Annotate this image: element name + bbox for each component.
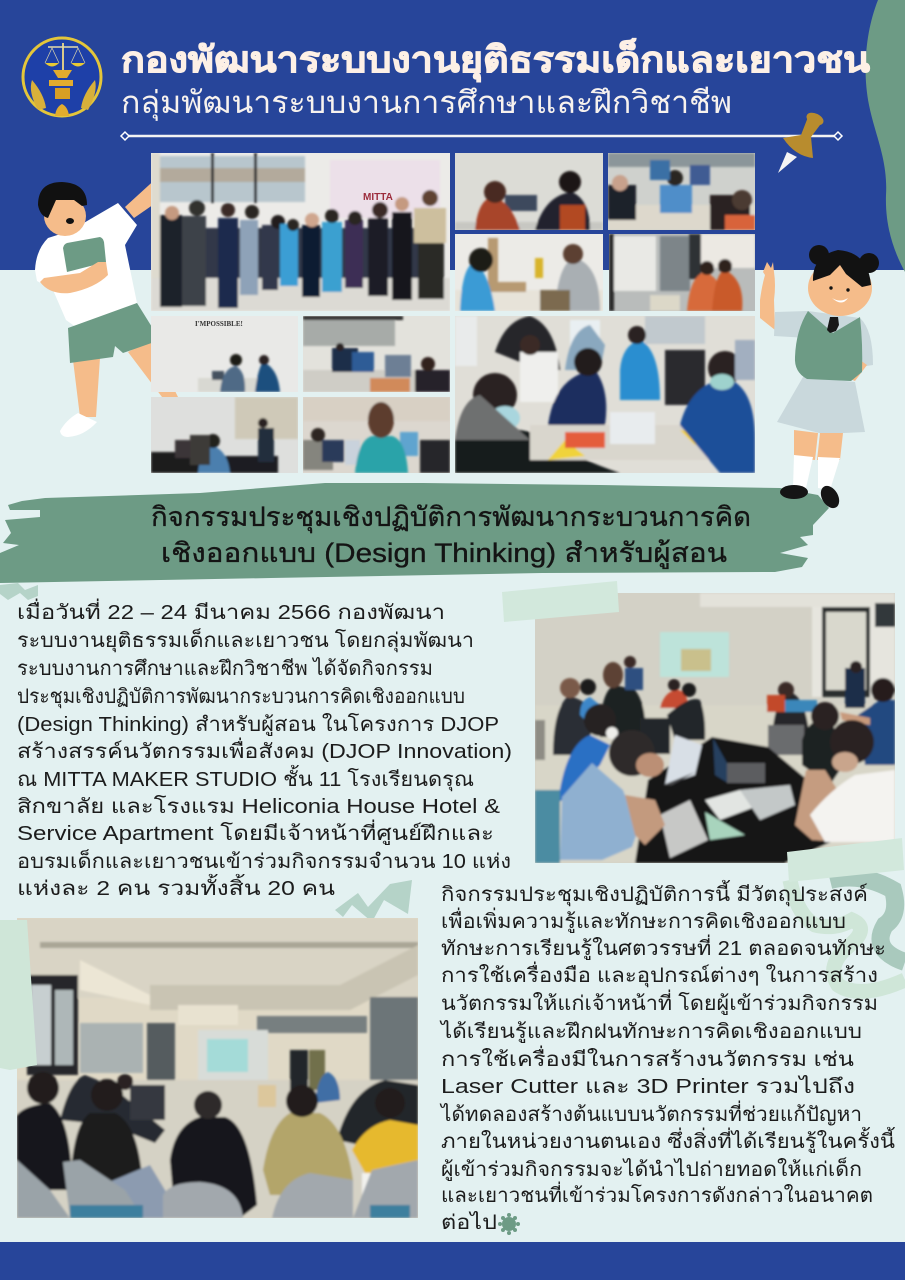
shoe bbox=[60, 413, 97, 437]
tie bbox=[827, 317, 839, 333]
photo: flipchart and two participants bbox=[609, 234, 755, 311]
body text: left column: สิกขาลัย และโรงแรม Heliconia House Hotel & bbox=[17, 795, 501, 818]
shoes bbox=[780, 483, 843, 511]
shorts bbox=[68, 303, 160, 363]
face bbox=[44, 196, 86, 236]
logo: department seal bbox=[23, 38, 101, 116]
text: wall slogan: I'MPOSSIBLE! bbox=[195, 320, 243, 328]
photo: workshop tables bbox=[608, 153, 755, 230]
skirt bbox=[777, 377, 865, 434]
mouth bbox=[66, 218, 74, 224]
heading text: กิจกรรมประชุมเชิงปฏิบัติการพัฒนากระบวนการคิด bbox=[151, 502, 751, 534]
socks bbox=[793, 455, 840, 490]
header blue band bbox=[0, 0, 905, 270]
character: girl in uniform bbox=[760, 245, 879, 511]
body text: left column: สร้างสรรค์นวัตกรรมเพื่อสังคม (DJOP Innovation) bbox=[17, 737, 512, 763]
shirt bbox=[35, 203, 137, 330]
photo: room seen from afar bbox=[151, 397, 298, 473]
body text: right column: ทักษะการเรียนรู้ในศตวรรษที่ 21 ตลอดจนทักษะ bbox=[441, 934, 886, 961]
bottom blue bar bbox=[0, 1242, 905, 1280]
photo: participant assembling model bbox=[455, 234, 603, 311]
body text: left column: เมื่อวันที่ 22 – 24 มีนาคม 2566 กองพัฒนา bbox=[17, 598, 445, 624]
vest bbox=[795, 311, 862, 381]
character: boy holding book bbox=[35, 175, 178, 437]
header divider line bbox=[121, 132, 842, 140]
raised arm bbox=[125, 175, 160, 218]
body text: right column: ผู้เข้าร่วมกิจกรรมจะได้นำไปถ่ายทอดให้แก่เด็ก bbox=[441, 1156, 862, 1182]
photo: close-up participants crafting bbox=[455, 316, 755, 473]
body text: left column: ณ MITTA MAKER STUDIO ชั้น 11 โรงเรียนดรุณ bbox=[17, 765, 474, 792]
face bbox=[808, 260, 872, 316]
hand on hip bbox=[848, 360, 867, 381]
photo: seated group facing projector bbox=[17, 918, 418, 1218]
hair and buns bbox=[809, 245, 879, 292]
book bbox=[63, 237, 106, 272]
body text: right column: เพื่อเพิ่มความรู้และทักษะการคิดเชิงออกแบบ bbox=[441, 907, 846, 934]
body text: left column: อบรมเด็กและเยาวชนเข้าร่วมกิจกรรมจำนวน 10 แห่ง bbox=[17, 848, 511, 873]
body text: right column: ได้เรียนรู้และฝึกฝนทักษะการคิดเชิงออกแบบ bbox=[439, 1020, 862, 1044]
decorative tape strips over photos bbox=[0, 581, 904, 1070]
heading banner bbox=[0, 483, 829, 583]
body text: right column: ภายในหน่วยงานตนเอง ซึ่งสิ่งที่ได้เรียนรู้ในครั้งนี้ bbox=[441, 1127, 895, 1154]
hair bbox=[38, 182, 87, 218]
icon: push pin bbox=[778, 110, 825, 173]
photo: workshop room with projector screen bbox=[535, 593, 895, 863]
legs bbox=[73, 340, 178, 417]
body text: left column: (Design Thinking) สำหรับผู้สอน ในโครงการ DJOP bbox=[17, 713, 499, 737]
body text: right column: ต่อไป bbox=[441, 1211, 497, 1234]
photo: woman in teal shirt bbox=[303, 397, 450, 473]
photo: group portrait at MITTA bbox=[151, 153, 450, 311]
heading banner: เชิงออกแบบ (Design Thinking) สำหรับผู้สอน bbox=[161, 538, 727, 569]
body text: right column: นวัตกรรมให้แก่เจ้าหน้าที่ โดยผู้เข้าร่วมกิจกรรม bbox=[441, 989, 878, 1016]
body text: left column: Service Apartment โดยมีเจ้าหน้าที่ศูนย์ฝึกและ bbox=[17, 819, 494, 846]
smile bbox=[832, 298, 848, 302]
text: MITTA sign: MITTA bbox=[363, 192, 393, 203]
photo: wide workshop room bbox=[303, 316, 450, 392]
body text: left column bbox=[17, 598, 512, 900]
body text: right column: การใช้เครื่องมือ และอุปกรณ์ต่างๆ ในการสร้าง bbox=[441, 961, 878, 988]
decorative green wave bbox=[866, 0, 905, 272]
body text: right column: และเยาวชนที่เข้าร่วมโครงการดังกล่าวในอนาคต bbox=[441, 1181, 873, 1207]
raised hand bbox=[760, 262, 775, 330]
body text: right column: กิจกรรมประชุมเชิงปฏิบัติการนี้ มีวัตถุประสงค์ bbox=[441, 880, 868, 907]
body text: right column: การใช้เครื่องมีในการสร้างนวัตกรรม เช่น bbox=[441, 1045, 854, 1071]
icon: green flower end mark bbox=[498, 1213, 520, 1235]
subtitle: กลุ่มพัฒนาระบบงานการศึกษาและฝึกวิชาชีพ bbox=[121, 85, 732, 122]
title: กองพัฒนาระบบงานยุติธรรมเด็กและเยาวชน bbox=[121, 37, 870, 83]
decorative zigzags and swirl behind content bbox=[0, 583, 905, 991]
body text: right column: ได้ทดลองสร้างต้นแบบนวัตกรรมที่ช่วยแก้ปัญหา bbox=[439, 1100, 862, 1126]
body text: left column: แห่งละ 2 คน รวมทั้งสิ้น 20 คน bbox=[17, 874, 335, 900]
photo: I'MPOSSIBLE room bbox=[151, 316, 298, 392]
body text: left column: ระบบงานการศึกษาและฝึกวิชาชีพ ได้จัดกิจกรรม bbox=[17, 657, 433, 680]
body text: right column: Laser Cutter และ 3D Printer รวมไปถึง bbox=[441, 1075, 855, 1098]
body text: right column bbox=[439, 880, 895, 1234]
blouse bbox=[774, 311, 873, 381]
body text: left column: ประชุมเชิงปฏิบัติการพัฒนากระบวนการคิดเชิงออกแบบ bbox=[17, 686, 465, 709]
legs bbox=[794, 430, 843, 460]
photo collage bbox=[151, 153, 755, 473]
body text: left column: ระบบงานยุติธรรมเด็กและเยาวชน โดยกลุ่มพัฒนา bbox=[17, 627, 474, 653]
forearm bbox=[40, 262, 108, 293]
photo: two participants at laptop bbox=[455, 153, 603, 230]
